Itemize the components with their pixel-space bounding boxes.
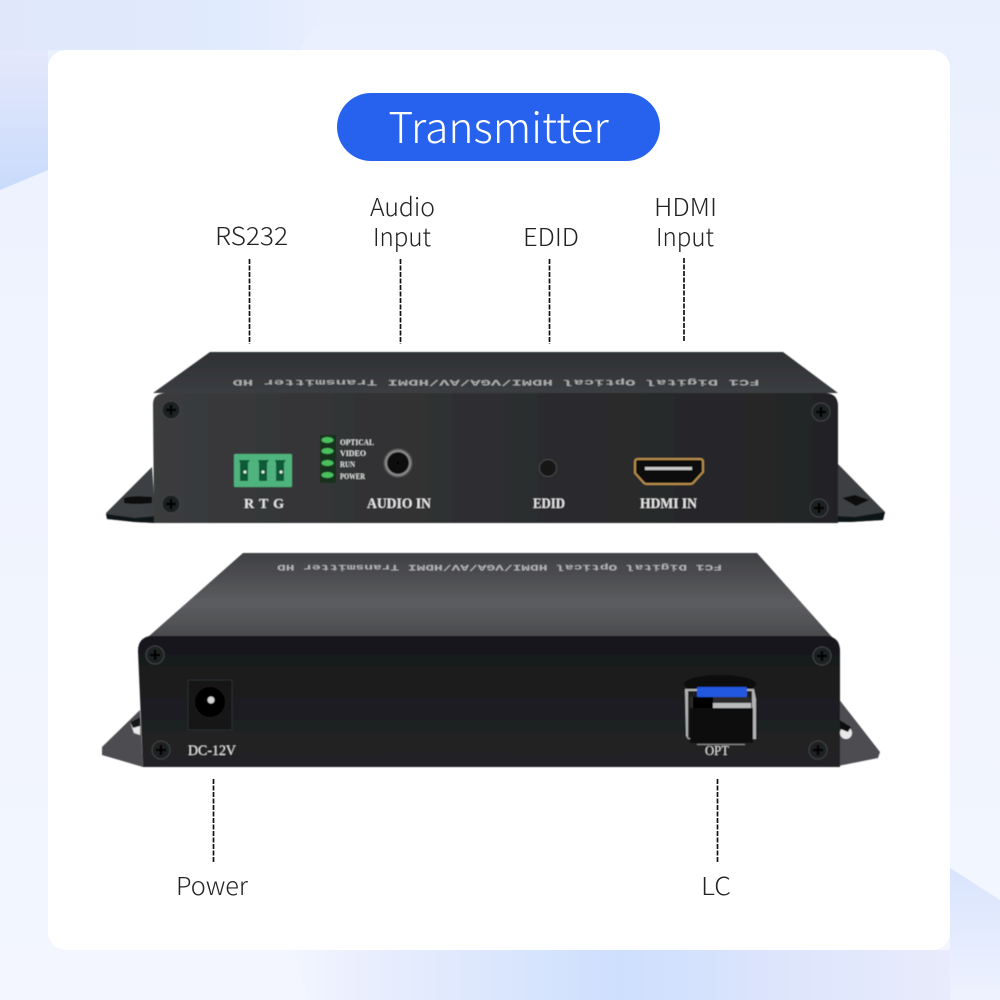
audio jack: [383, 448, 413, 478]
LED indicators: OPTICAL: [340, 438, 374, 447]
LED indicators: VIDEO: [340, 449, 366, 458]
port text: AUDIO IN: AUDIO IN: [367, 496, 431, 512]
terminal block: [234, 454, 292, 487]
dashed leader: HDMI Input: [683, 258, 685, 342]
title pill: [337, 93, 660, 161]
LED indicators: POWER: [340, 472, 365, 481]
top cover: [148, 553, 832, 637]
label: EDID: EDID: [523, 218, 579, 254]
port text: R T G: R T G: [244, 497, 284, 512]
dashed leader: RS232: [248, 259, 250, 344]
front face: [138, 636, 840, 767]
dashed leader: LC: [716, 779, 718, 862]
title pill: Transmitter: [388, 95, 609, 156]
label: Power: Power: [176, 867, 249, 903]
top cover: [153, 352, 838, 393]
right mounting foot: [833, 698, 880, 767]
screws: [146, 646, 831, 759]
EDID button: [540, 460, 556, 476]
label: HDMI Input: [654, 188, 717, 254]
top cover: FC1 Digital Optical HDMI/VGA/AV/HDMI Transmitter HD: [232, 377, 760, 386]
HDMI port: [635, 459, 703, 484]
top cover: FC1 Digital Optical HDMI/VGA/AV/HDMI Transmitter HD: [277, 562, 722, 571]
port text: HDMI IN: HDMI IN: [640, 496, 697, 512]
left mounting foot: [106, 467, 156, 523]
label: Audio Input: Audio: [370, 188, 435, 224]
LC fiber module: [684, 675, 756, 745]
device: rear panel unit: [102, 553, 880, 767]
port text: OPT: OPT: [705, 743, 730, 758]
label: HDMI Input: HDMI: [654, 188, 717, 224]
DC power jack: [188, 680, 232, 730]
dashed leader: Power: [212, 779, 214, 862]
port text: EDID: EDID: [533, 496, 565, 512]
label: HDMI Input: Input: [656, 218, 714, 254]
label: Audio Input: [370, 188, 435, 254]
left mounting foot: [102, 710, 143, 767]
front face: [153, 393, 838, 523]
label: Audio Input: Input: [373, 218, 431, 254]
dashed leader: Audio Input: [400, 259, 402, 344]
right mounting foot: [836, 462, 885, 522]
LED indicators: [320, 435, 374, 483]
LED indicators: RUN: [340, 460, 355, 469]
dashed leader: EDID: [548, 259, 550, 344]
label: LC: LC: [701, 867, 731, 903]
screws: [162, 401, 830, 517]
port text: DC-12V: DC-12V: [188, 743, 236, 759]
device: front panel unit: [106, 352, 885, 523]
label: RS232: RS232: [215, 217, 288, 253]
